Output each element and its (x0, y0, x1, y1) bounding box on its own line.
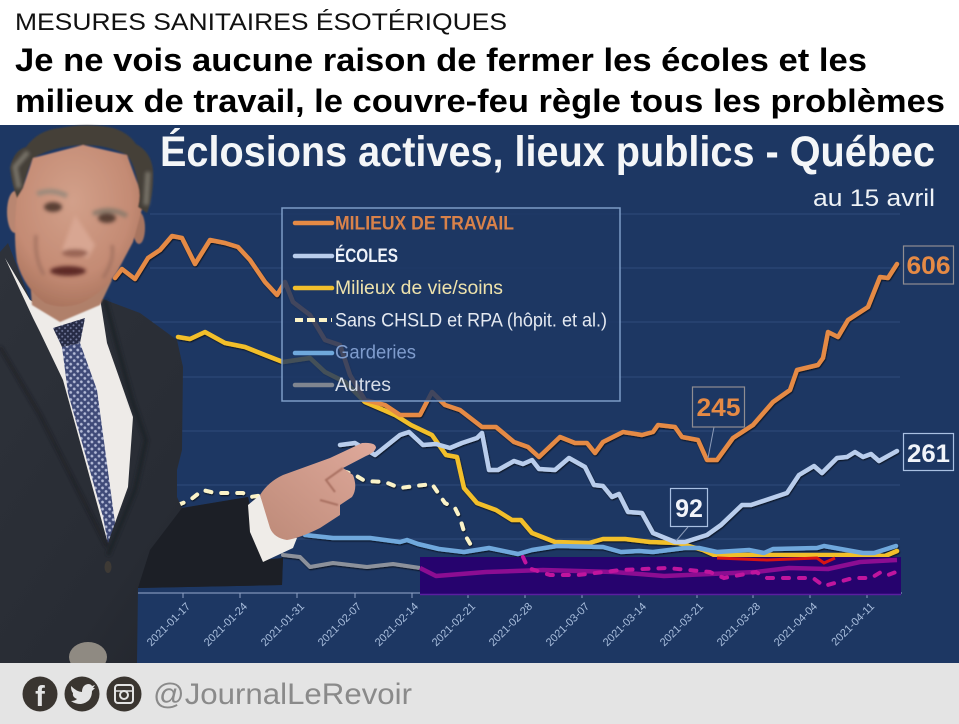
callout: 92: 92 (675, 495, 703, 523)
facial features (36, 191, 127, 278)
kicker: MESURES SANITAIRES ÉSOTÉRIQUES (15, 9, 507, 36)
legend (282, 208, 620, 401)
ear left (7, 191, 23, 233)
legend: écoles (295, 245, 398, 267)
callout: 245: 245 (696, 394, 741, 422)
x axis: 2021-01-17 (145, 601, 193, 649)
legend: écoles: ÉCOLES (335, 245, 398, 267)
line: garderies (305, 535, 896, 554)
x axis: 2021-01-31 (259, 601, 307, 649)
icon: instagram (106, 676, 142, 712)
suit button (104, 561, 112, 573)
line: sans CHSLD (178, 470, 472, 547)
x axis: 2021-03-21 (658, 601, 706, 649)
legend: garderies (295, 342, 416, 364)
x axis: 2021-02-28 (487, 601, 535, 649)
ear right (133, 212, 145, 244)
suit (0, 243, 283, 663)
callout: 261 (904, 434, 954, 470)
chart subtitle: au 15 avril (813, 185, 935, 212)
overlay line: purple dashed (523, 557, 896, 586)
icon: facebook (22, 676, 58, 713)
line: autres (283, 555, 420, 568)
icon: twitter (64, 676, 100, 712)
panel: chart (0, 125, 959, 663)
legend: autres: Autres (335, 375, 391, 396)
footer bar (0, 663, 959, 724)
overlay line: purple (420, 560, 897, 576)
legend: autres (295, 375, 391, 396)
header (15, 9, 945, 119)
chart lines (115, 236, 897, 568)
legend: milieux de travail: MILIEUX DE TRAVAIL (335, 214, 514, 234)
callout: 606 (904, 246, 954, 284)
headline: Je ne vois aucune raison de fermer les écoles et les (15, 42, 867, 78)
x axis: 2021-03-14 (601, 601, 649, 649)
handle: @JournalLeRevoir (153, 678, 412, 711)
head (7, 125, 153, 322)
x axis: 2021-02-07 (316, 601, 364, 649)
hair highlight (15, 152, 148, 205)
icon: facebook: f (35, 681, 45, 713)
legend: sans CHSLD: Sans CHSLD et RPA (hôpit. et al.) (335, 310, 607, 332)
hand (260, 443, 376, 540)
sleeve shade (138, 497, 283, 588)
purple overlay box (420, 557, 901, 595)
headline: milieux de travail, le couvre-feu règle tous les problèmes (15, 83, 945, 119)
face (15, 145, 143, 306)
photo: man pointing (0, 125, 376, 672)
line: écoles (340, 432, 897, 542)
x axis: 2021-03-07 (544, 601, 592, 649)
finger shadow (320, 468, 343, 505)
legend: milieux de vie: Milieux de vie/soins (335, 278, 503, 299)
callout: 245 (692, 387, 744, 458)
x axis (138, 593, 902, 649)
x axis: 2021-03-28 (715, 601, 763, 649)
tie (62, 343, 115, 543)
lapel shade (0, 300, 146, 555)
callout: 261: 261 (907, 440, 950, 468)
callout: 92 (670, 488, 708, 541)
cuff (248, 495, 297, 562)
line: milieux de travail (115, 236, 897, 460)
x axis: 2021-04-04 (772, 601, 820, 649)
headline (15, 42, 945, 119)
neck (30, 280, 112, 322)
x axis: 2021-02-14 (373, 601, 421, 649)
shirt (5, 258, 133, 540)
hair (10, 125, 153, 213)
x axis: 2021-02-21 (430, 601, 478, 649)
overlay line: red (717, 558, 835, 563)
line: milieux de vie (178, 332, 897, 556)
microphone (69, 642, 107, 672)
tie knot (53, 318, 85, 347)
callout: 606: 606 (906, 252, 950, 280)
legend: garderies: Garderies (335, 342, 416, 364)
x axis: 2021-04-11 (829, 601, 877, 648)
x axis: 2021-01-24 (202, 601, 250, 649)
